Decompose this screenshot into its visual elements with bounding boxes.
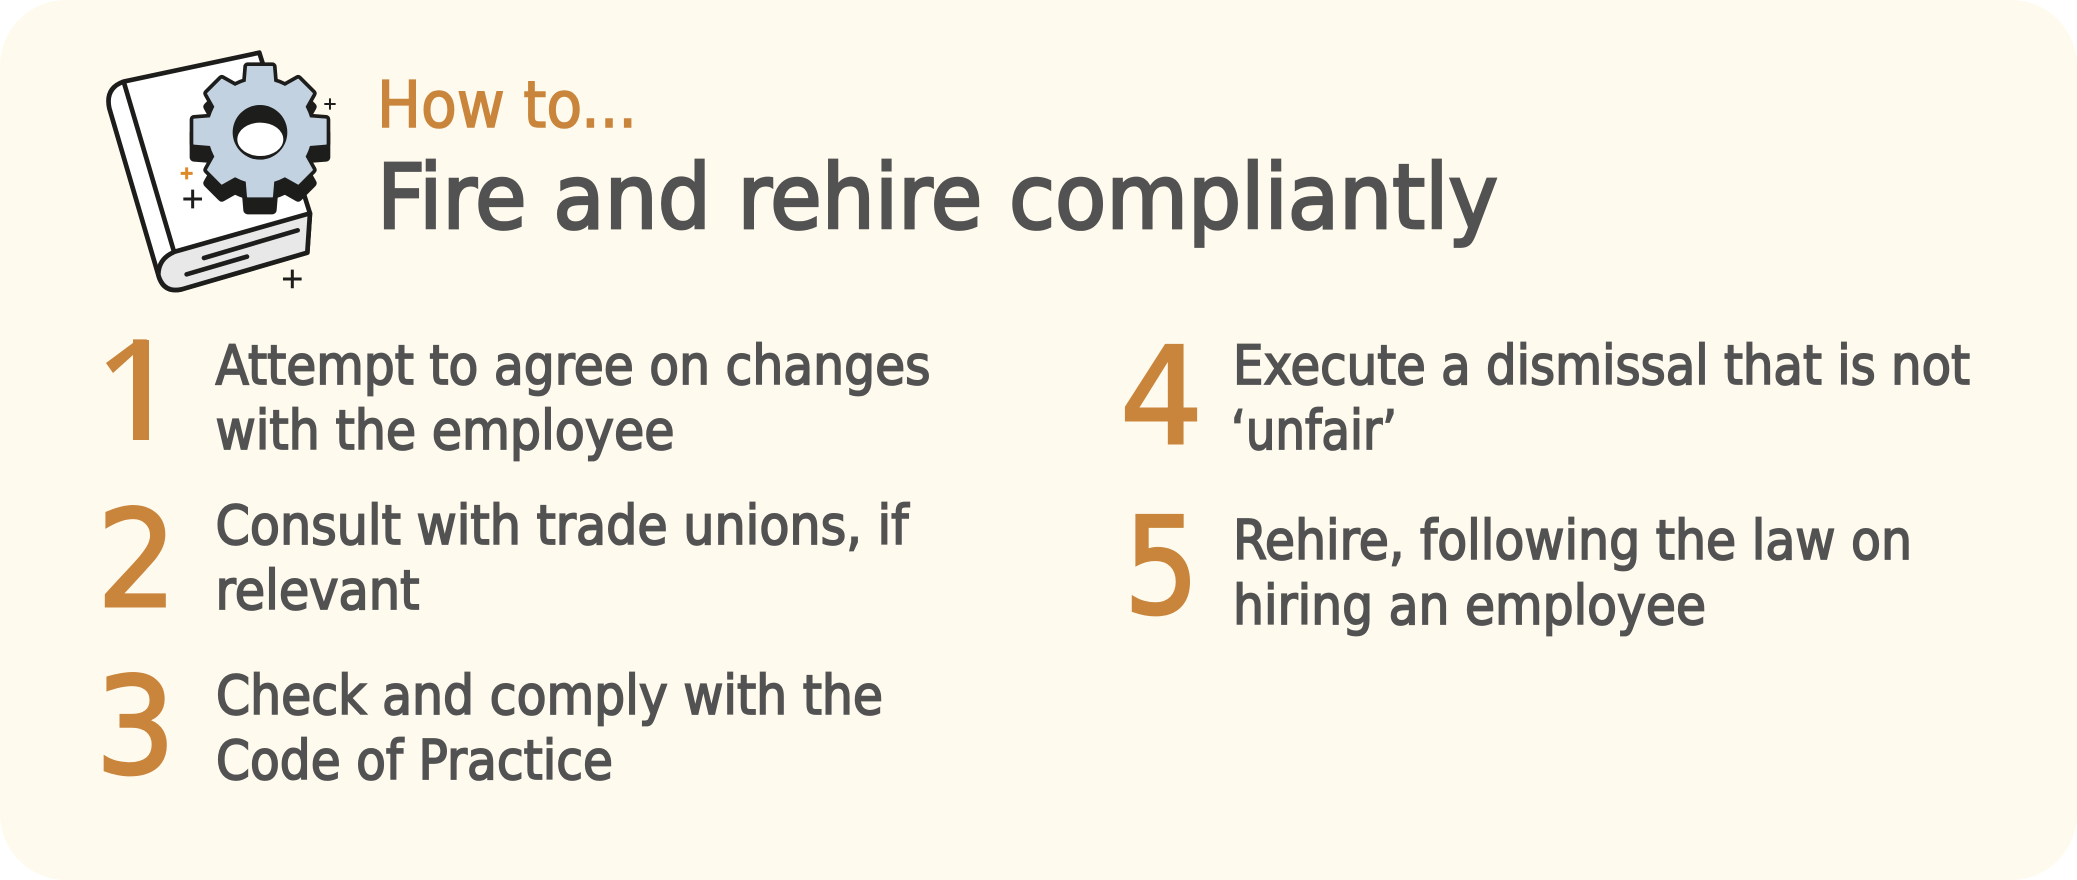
step 2 xyxy=(97,482,910,638)
number 3: 3 xyxy=(96,649,176,805)
step 4 text: Execute a dismissal that is not xyxy=(1233,334,1970,397)
step 5 text: Rehire, following the law on xyxy=(1233,509,1912,572)
icon: gear shadow xyxy=(194,80,326,210)
title: Fire and rehire compliantly: Fire and rehire compliantly xyxy=(377,145,1498,249)
icon: book cover xyxy=(109,53,310,290)
step 4 text: ‘unfair’ xyxy=(1231,399,1397,462)
icon: gear hole xyxy=(233,105,287,160)
step 1 text: Attempt to agree on changes xyxy=(216,334,930,397)
icon: gear outline xyxy=(194,67,326,197)
icon: book with gear xyxy=(109,53,336,290)
number 1 xyxy=(106,339,149,440)
step 3 text: Code of Practice xyxy=(216,729,613,792)
step 2 text: Consult with trade unions, if xyxy=(216,494,910,557)
icon: plus marks xyxy=(181,98,336,288)
step 1 text: with the employee xyxy=(216,399,674,462)
icon: page lines xyxy=(187,230,298,274)
step 3 xyxy=(96,649,883,805)
number 5: 5 xyxy=(1124,489,1199,645)
icon: book pages xyxy=(158,213,310,290)
number 4: 4 xyxy=(1120,319,1203,475)
step 2 text: relevant xyxy=(216,559,420,622)
subtitle: How to...: How to... xyxy=(377,68,637,143)
step 1 xyxy=(106,339,929,462)
step 4 xyxy=(1120,319,1970,475)
icon: gear face xyxy=(194,67,326,197)
step 3 text: Check and comply with the xyxy=(216,664,883,727)
number 1: 1 xyxy=(94,312,182,473)
icon: book spine line xyxy=(124,83,174,252)
step 5 xyxy=(1124,489,1912,645)
number 2: 2 xyxy=(97,482,177,638)
step 5 text: hiring an employee xyxy=(1233,574,1706,637)
